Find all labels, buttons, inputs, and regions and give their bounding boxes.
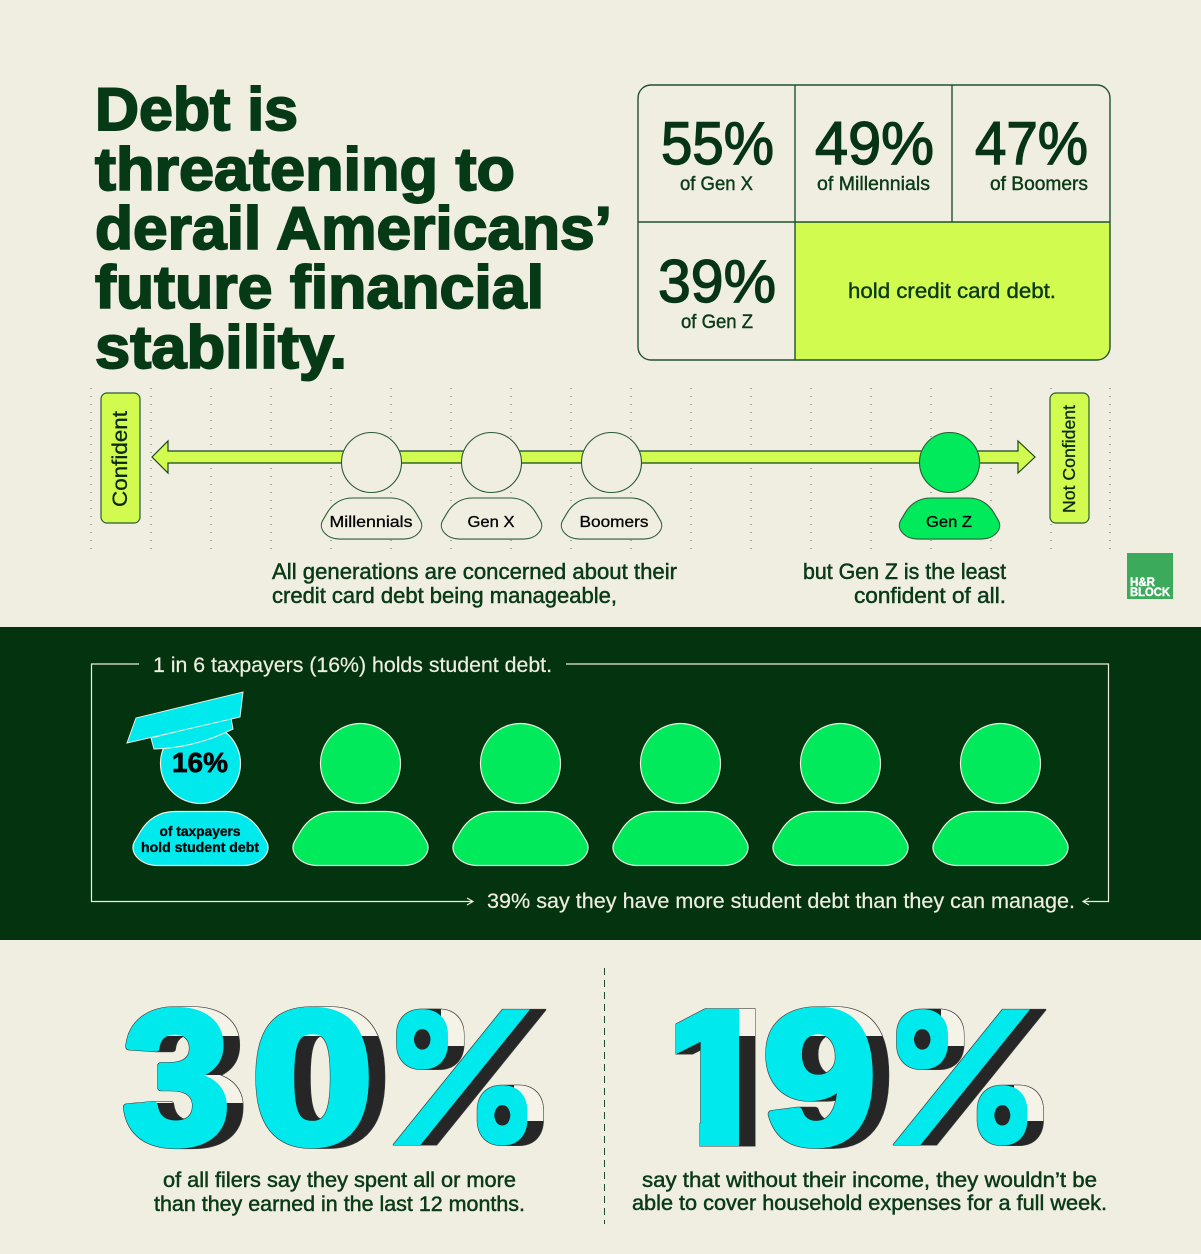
person 3	[453, 724, 588, 866]
big number: 19%: 9	[762, 971, 877, 1183]
title	[95, 76, 612, 381]
big number: 19%: %	[842, 977, 1081, 1184]
title: stability.	[95, 314, 347, 381]
person 5	[773, 724, 908, 866]
big number: 19%: 9	[762, 971, 877, 1183]
big number: 30%: 3	[123, 971, 230, 1184]
person: Boomers: Boomers	[580, 514, 648, 531]
person: Gen X	[441, 432, 542, 539]
big number: 19%: %	[906, 1020, 1031, 1169]
pill: Not Confident: Not Confident	[1059, 405, 1079, 513]
logo: H&R Block: H&R	[1130, 577, 1156, 589]
big number: 30%: 3	[123, 971, 230, 1184]
stat: Gen X: of Gen X	[680, 174, 753, 195]
highlight label: hold credit card debt.	[848, 280, 1056, 303]
stat: Millennials: of Millennials	[817, 174, 930, 195]
big number: 19%: %	[893, 991, 1022, 1140]
panel: credit card debt table	[638, 85, 1110, 360]
big number: 30%: 0	[251, 971, 374, 1184]
pill: Not Confident	[1050, 393, 1089, 523]
highlight cell	[795, 222, 1110, 360]
caption: all generations: credit card debt being manageable,	[272, 583, 617, 608]
caption: 19%: able to cover household expenses for a full week.	[632, 1191, 1107, 1215]
frame with arrows	[92, 664, 1108, 905]
caption: 30%	[154, 1168, 525, 1216]
big number: 30%: %	[406, 1020, 531, 1169]
confidence scale	[91, 388, 1110, 556]
caption: all generations	[272, 559, 677, 608]
stat: Gen X: 55%	[661, 110, 774, 177]
big number: 30%	[123, 1006, 546, 1150]
footnote: 39% say they have more student debt than they can manage.	[487, 890, 1075, 913]
big number: 19%: 1	[648, 970, 784, 1189]
person: 16% with graduation cap: hold student debt	[141, 840, 260, 855]
person: 16% with graduation cap: 16%	[172, 747, 228, 778]
big number: 30%: %	[393, 991, 522, 1140]
person 2	[293, 724, 428, 866]
title: threatening to	[95, 136, 515, 203]
person: Gen Z: Gen Z	[926, 514, 972, 531]
person: Gen Z	[899, 432, 1000, 539]
stat: Gen Z: 39%	[658, 248, 776, 315]
person: Boomers	[561, 432, 662, 539]
person: 16% with graduation cap	[127, 692, 268, 866]
person: Gen X: Gen X	[468, 514, 515, 531]
person: 16% with graduation cap: of taxpayers	[160, 824, 240, 839]
stat: Millennials: 49%	[815, 110, 934, 177]
icon: graduation cap	[127, 692, 243, 749]
big number: 30%: %	[393, 991, 522, 1140]
table frame	[638, 85, 1110, 360]
logo: H&R Block	[1127, 553, 1173, 599]
caption: 19%: say that without their income, they wouldn’t be	[642, 1168, 1097, 1192]
caption: 30%: of all filers say they spent all or more	[163, 1168, 516, 1192]
title: Debt is	[95, 76, 298, 143]
caption: Gen Z: but Gen Z is the least	[803, 559, 1006, 584]
stat: Boomers: of Boomers	[990, 174, 1088, 195]
title: derail Americans’	[95, 195, 612, 262]
caption: 19%	[632, 1168, 1107, 1215]
big number: 19%: %	[906, 1020, 1031, 1169]
person 6	[933, 724, 1068, 866]
panel: student debt	[0, 627, 1201, 940]
person: Millennials	[321, 432, 422, 539]
big number: 30%: 0	[251, 971, 374, 1184]
caption: 30%: than they earned in the last 12 months.	[154, 1192, 525, 1216]
logo: H&R Block: BLOCK	[1130, 587, 1171, 599]
caption: Gen Z	[803, 559, 1006, 608]
stat: Gen Z: of Gen Z	[681, 312, 753, 333]
person 4	[613, 724, 748, 866]
big number: 19%: 1	[648, 970, 784, 1189]
heading: 1 in 6 taxpayers (16%) holds student debt.	[153, 654, 552, 677]
caption: Gen Z: confident of all.	[854, 583, 1006, 608]
big number: 30%: %	[406, 1020, 531, 1169]
title: future financial	[95, 254, 544, 321]
big number: 19%	[676, 1006, 1046, 1149]
caption: all generations: All generations are concerned about their	[272, 559, 677, 584]
pill: Confident	[101, 393, 140, 523]
big number: 30%: %	[342, 977, 581, 1184]
stat: Boomers: 47%	[975, 110, 1088, 177]
arrow: double-headed scale	[152, 441, 1035, 473]
pill: Confident: Confident	[109, 411, 132, 507]
big number: 19%: %	[893, 991, 1022, 1140]
person: Millennials: Millennials	[330, 514, 412, 531]
